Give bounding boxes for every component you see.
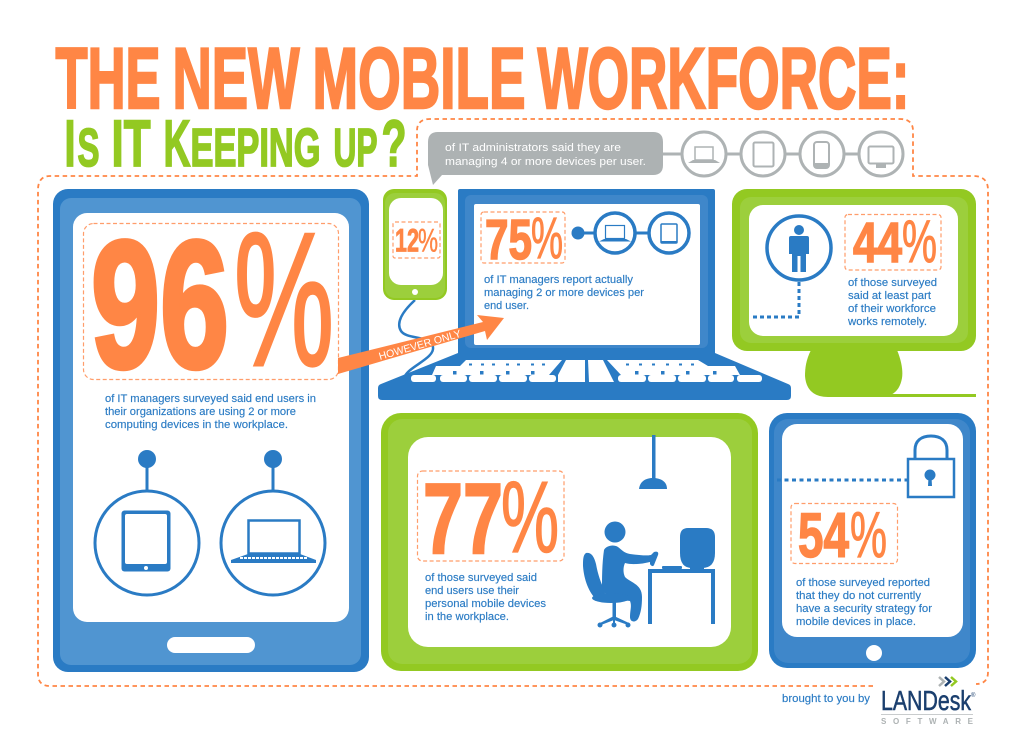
stat: 44%: % — [902, 208, 937, 275]
panel: wide monitor 77% — [381, 413, 758, 671]
text: 96% description: their organizations are using 2 or more — [105, 406, 296, 418]
panel: large tablet 96% — [53, 189, 369, 672]
callout: devices per user: of IT administrators said they are — [445, 142, 621, 154]
text: 54% description — [796, 577, 932, 628]
text: 75% description: of IT managers report actually — [484, 274, 634, 286]
stat: 44%: 44 — [853, 211, 902, 275]
subtitle: K — [164, 106, 191, 180]
arrow: however only — [338, 315, 504, 374]
text: 54% description: of those surveyed reported — [796, 577, 930, 589]
stat: 12%: % — [418, 222, 438, 258]
logo: LANDesk Software: ® — [971, 692, 976, 699]
title: THE — [56, 31, 160, 127]
arrow: however only: HOWEVER ONLY — [378, 328, 463, 363]
text: 44% description: of their workforce — [848, 303, 936, 315]
text: 54% description: mobile devices in place. — [796, 616, 916, 628]
laptop keyboard base — [378, 353, 791, 400]
subtitle: IT — [112, 106, 150, 180]
subtitle: S — [78, 118, 100, 178]
stat: percent sign: % — [234, 194, 334, 406]
icon: tablet in circle — [95, 450, 199, 595]
dashed box: 44% — [845, 214, 941, 270]
text: 77% description: personal mobile devices — [425, 598, 547, 610]
text: 54% description: have a security strategy for — [796, 603, 932, 615]
text: 77% description — [425, 572, 547, 623]
dashed box: 96% — [84, 224, 338, 380]
icon: ceiling lamp — [639, 435, 667, 489]
stat: 77%: 77 — [423, 463, 503, 575]
text: 96% description: of IT managers surveyed said end users in — [105, 393, 316, 405]
text: 44% description: said at least part — [848, 290, 931, 302]
dashed box: 12% — [393, 222, 440, 258]
stat: 75%: % — [531, 206, 563, 271]
dashed outline frame — [38, 119, 988, 686]
text: 77% description: in the workplace. — [425, 611, 509, 623]
icon: padlock — [908, 436, 954, 497]
text: 44% description: works remotely. — [847, 316, 927, 328]
title: NEW — [172, 31, 300, 127]
stat: 54%: 54 — [798, 501, 849, 571]
icon: laptop in circle — [221, 450, 325, 595]
dashed box: 54% — [791, 504, 898, 564]
text: 75% description — [484, 274, 644, 312]
panel: phone 12% — [383, 189, 447, 300]
text: 77% description: end users use their — [425, 585, 519, 597]
stat: 75%: 75 — [485, 208, 532, 272]
stat: 77%: % — [501, 462, 559, 574]
text: 96% description — [105, 393, 316, 431]
footer credit: brought to you by: brought to you by — [782, 693, 871, 705]
icons: laptop and tablet link — [572, 213, 689, 253]
panel: laptop 75% — [378, 189, 791, 400]
subtitle: UP — [334, 118, 378, 178]
text: 54% description: that they do not currently — [796, 590, 922, 602]
logo: LANDesk Software — [881, 677, 976, 726]
text: 44% description: of those surveyed — [848, 277, 937, 289]
dashed box: 75% — [481, 212, 565, 263]
stat: 96: 96 — [91, 204, 229, 406]
dotted connector — [752, 282, 799, 317]
grey device icons row — [663, 132, 903, 176]
logo: LANDesk Software: SOFTWARE — [881, 717, 974, 726]
icon: person at desk — [583, 522, 715, 628]
panel: tablet 54% — [769, 413, 976, 668]
text: 77% description: of those surveyed said — [425, 572, 537, 584]
callout: devices per user: managing 4 or more devices per user. — [445, 156, 646, 168]
icon: person in circle — [767, 216, 831, 280]
text: 44% description — [847, 277, 937, 328]
subtitle: I — [64, 106, 76, 180]
title — [56, 31, 910, 127]
subtitle: EEPING — [190, 118, 320, 178]
dotted connector — [777, 478, 908, 482]
stat: 54%: % — [850, 498, 887, 571]
title: MOBILE — [312, 31, 526, 127]
text: 75% description: end user. — [484, 300, 529, 312]
logo: LANDesk Software: LANDesk — [881, 685, 971, 716]
panel: monitor 44% — [732, 189, 976, 397]
subtitle: ? — [382, 106, 406, 180]
subtitle — [64, 106, 406, 180]
stat: 12%: 12 — [395, 222, 419, 258]
text: 75% description: managing 2 or more devices per — [484, 287, 644, 299]
dashed box: 77% — [418, 471, 564, 561]
callout: devices per user — [428, 132, 663, 185]
text: 96% description: computing devices in the workplace. — [105, 419, 288, 431]
icon: phone cable — [399, 300, 433, 376]
